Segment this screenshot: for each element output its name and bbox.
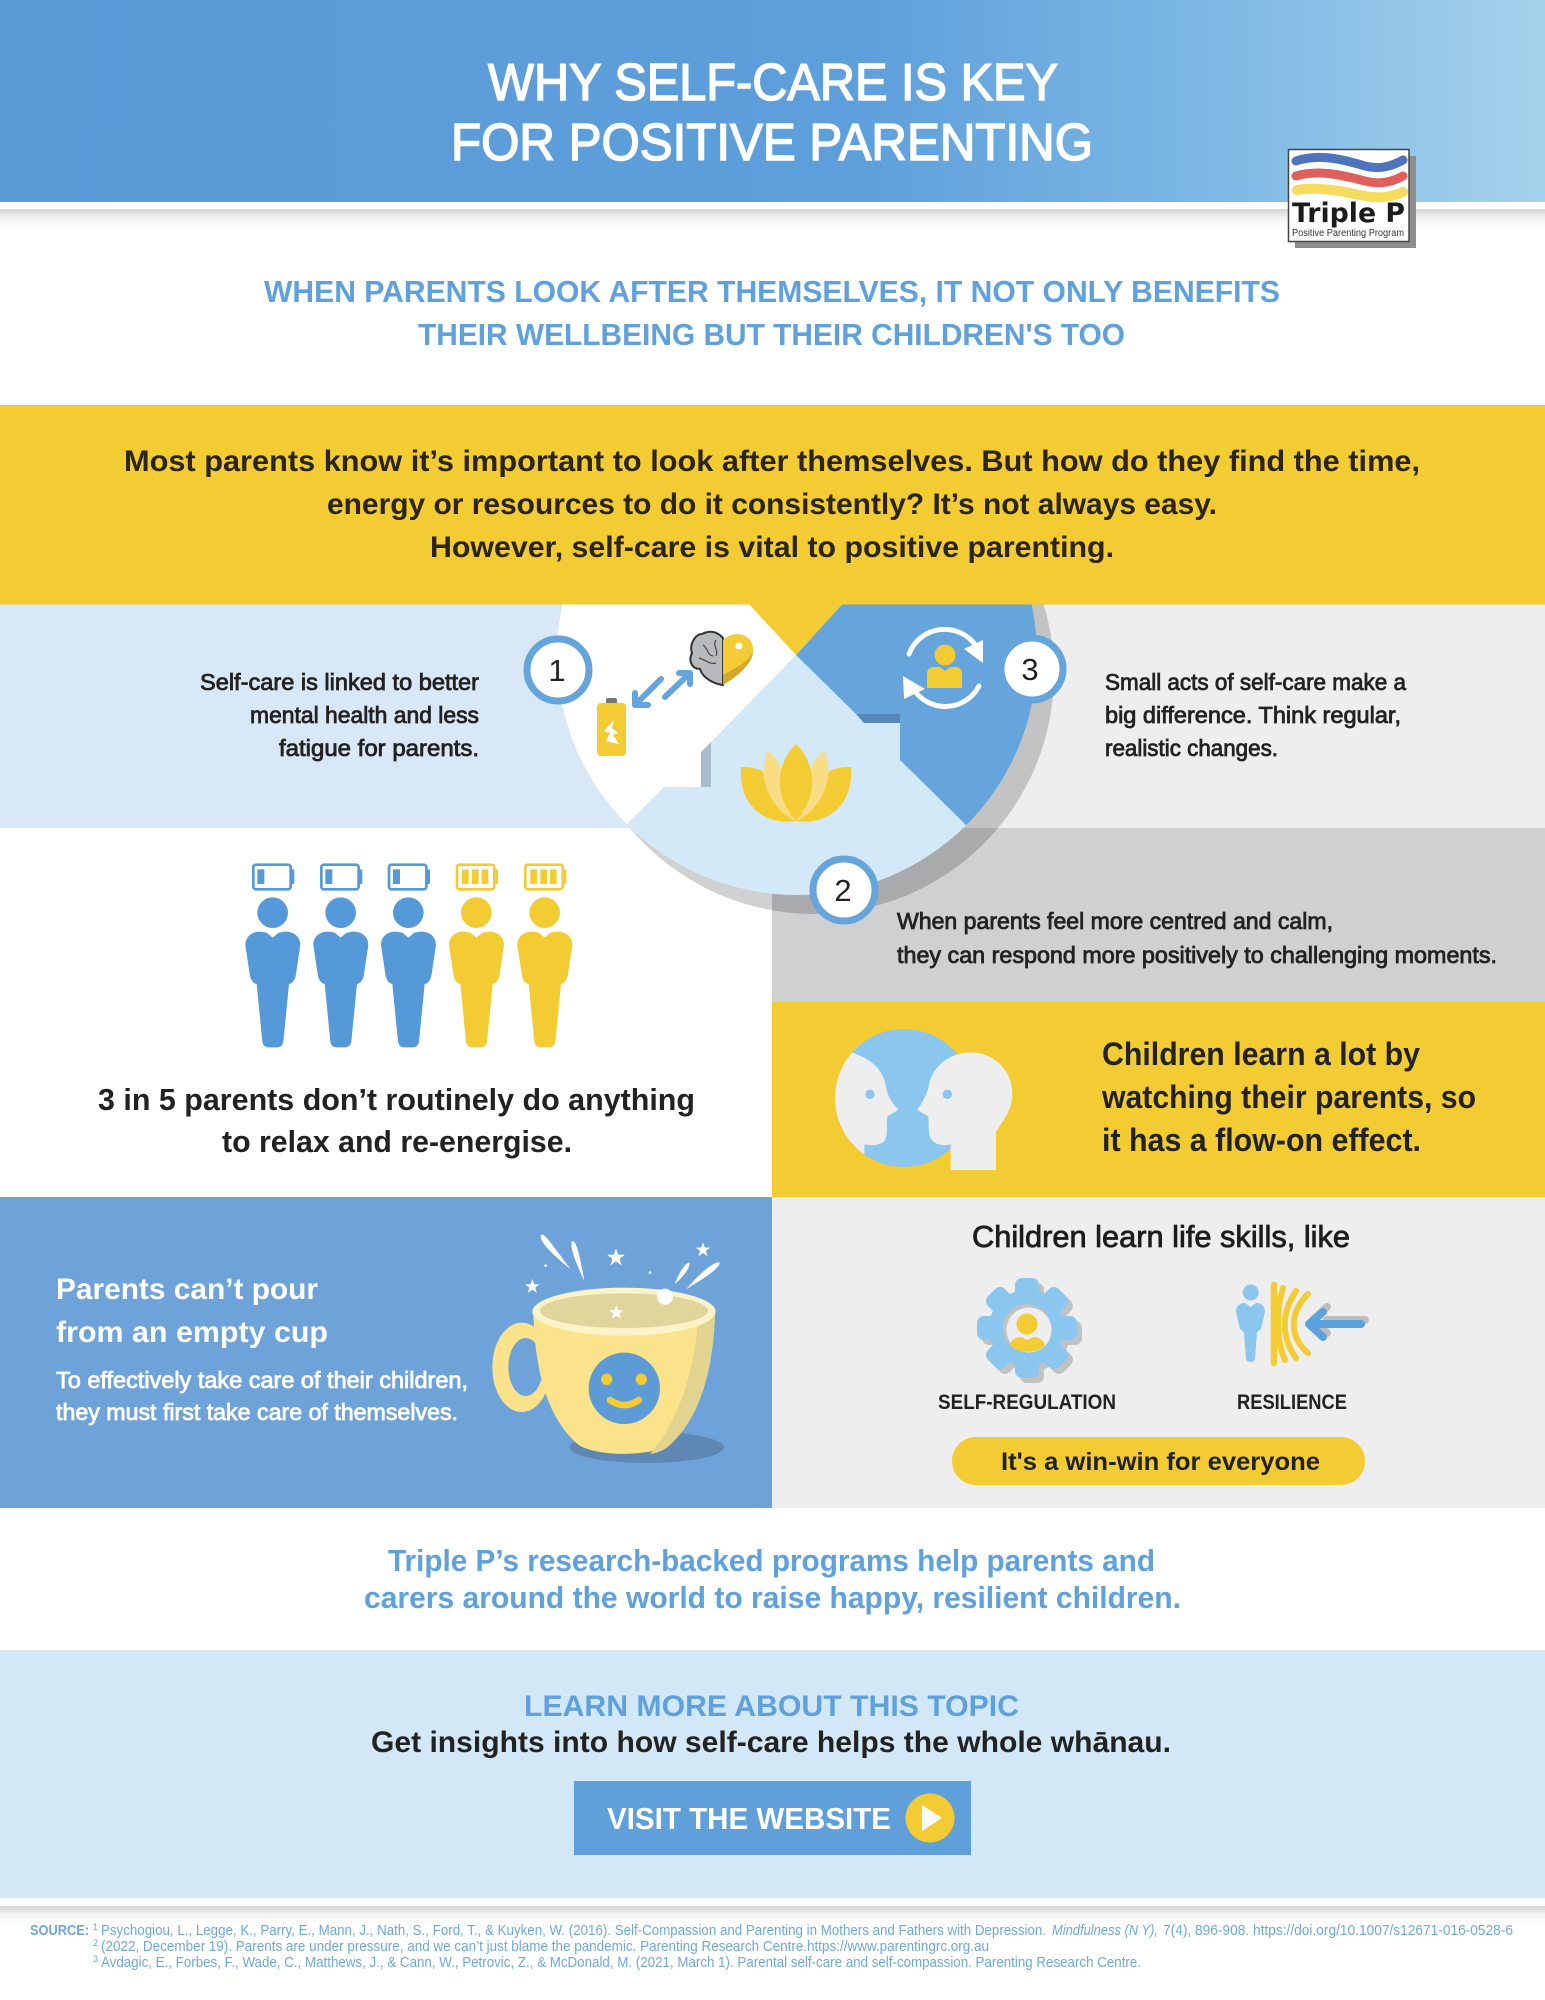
icon: lotus flower <box>741 744 851 822</box>
source references: 1 <box>93 1922 98 1932</box>
person 1 low battery <box>245 865 300 1047</box>
pill: win-win: It's a win-win for everyone <box>1001 1448 1320 1476</box>
text: point 1: Self-care is linked to better <box>200 669 479 695</box>
icon group: five people with batteries <box>245 865 572 1047</box>
person 2 low battery <box>313 865 368 1047</box>
subtitle: WHEN PARENTS LOOK AFTER THEMSELVES, IT NOT ONLY BENEFITS <box>264 274 1280 309</box>
statistic text: to relax and re-energise. <box>222 1124 572 1159</box>
number badge 2 <box>813 859 875 921</box>
source references: SOURCE: <box>30 1923 89 1939</box>
learn more heading: LEARN MORE ABOUT THIS TOPIC <box>524 1690 1019 1723</box>
label: self-regulation: SELF-REGULATION <box>938 1391 1116 1414</box>
statistic text: 3 in 5 parents don’t routinely do anything <box>98 1082 695 1117</box>
source references: Avdagic, E., Forbes, F., Wade, C., Matthews, J., & Cann, W., Petrovic, Z., & McDonald, M. (2021, March 1). Parental self-care and self-compassion. Parenting Research Centre. <box>101 1955 1141 1971</box>
pill: win-win <box>952 1437 1365 1485</box>
panel: yellow intro band <box>0 405 1545 604</box>
empty cup body text: To effectively take care of their children, <box>56 1367 468 1393</box>
number badge 2: 2 <box>834 873 852 908</box>
children learn text: Children learn a lot by <box>1102 1036 1420 1072</box>
text: point 3: realistic changes. <box>1105 735 1278 761</box>
text: point 3 <box>1105 669 1406 761</box>
circle wedges <box>558 604 1036 895</box>
text: point 1: fatigue for parents. <box>279 735 479 761</box>
icon: smiling cup <box>492 1234 724 1463</box>
panel: learn more <box>0 1650 1545 1898</box>
intro text: energy or resources to do it consistently? It’s not always easy. <box>327 488 1217 521</box>
icon: brain and heart <box>690 632 753 685</box>
source references: 7(4), 896-908. https://doi.org/10.1007/s12671-016-0528-6 <box>1163 1923 1513 1939</box>
empty cup heading <box>56 1273 328 1349</box>
footer shadow <box>0 1906 1545 1924</box>
icon: battery <box>597 698 626 756</box>
life skills heading: Children learn life skills, like <box>972 1219 1350 1254</box>
panel: life skills, grey <box>772 1197 1545 1508</box>
circle drop shadow <box>574 434 1054 914</box>
icon: self-care cycle <box>903 629 983 706</box>
text: point 2 <box>897 908 1497 968</box>
learn more subheading: Get insights into how self-care helps the whole whānau. <box>371 1726 1171 1759</box>
icon: double arrows <box>635 673 690 705</box>
subtitle: THEIR WELLBEING BUT THEIR CHILDREN'S TOO <box>418 317 1125 352</box>
title <box>451 54 1093 172</box>
panel: empty cup, blue <box>0 1197 772 1508</box>
text: point 3: big difference. Think regular, <box>1105 702 1401 728</box>
icon: gear with person <box>977 1278 1082 1383</box>
text: research-backed programs: Triple P’s research-backed programs help parents and <box>388 1543 1155 1578</box>
person 3 low battery <box>381 865 436 1047</box>
button: visit the website <box>574 1781 971 1855</box>
panel: light blue row, self-care point 1 <box>0 604 772 828</box>
intro text: Most parents know it’s important to look after themselves. But how do they find the time, <box>124 445 1420 478</box>
person 4 full battery <box>449 865 504 1047</box>
button: visit the website: VISIT THE WEBSITE <box>607 1801 891 1836</box>
source references: (2022, December 19). Parents are under pressure, and we can’t just blame the pandemic. Parenting Research Centre.https://www.parentingrc.org.au <box>101 1939 989 1955</box>
label: resilience: RESILIENCE <box>1237 1391 1347 1414</box>
text: research-backed programs: carers around the world to raise happy, resilient children. <box>364 1580 1181 1615</box>
empty cup body text <box>56 1367 468 1425</box>
children learn text: watching their parents, so <box>1101 1079 1476 1115</box>
source references: 3 <box>93 1954 98 1964</box>
text: point 3: Small acts of self-care make a <box>1105 669 1406 695</box>
panel: light grey row, self-care point 3 <box>772 604 1545 828</box>
central circle diagram <box>524 604 1066 924</box>
empty cup body text: they must first take care of themselves. <box>56 1399 458 1425</box>
icon: two faces <box>830 1029 1012 1170</box>
intro text: However, self-care is vital to positive parenting. <box>430 531 1114 564</box>
source references <box>30 1922 1513 1971</box>
statistic text <box>98 1082 695 1159</box>
children learn text <box>1101 1036 1476 1158</box>
text: point 2: When parents feel more centred and calm, <box>897 908 1333 934</box>
logo: Triple P <box>1288 150 1416 248</box>
title: WHY SELF-CARE IS KEY <box>488 54 1058 112</box>
empty cup heading: from an empty cup <box>56 1316 328 1349</box>
text: point 1: mental health and less <box>250 702 479 728</box>
text: point 2: they can respond more positively to challenging moments. <box>897 942 1497 968</box>
person 5 full battery <box>517 865 572 1047</box>
text: research-backed programs <box>364 1543 1181 1615</box>
number badge 3: 3 <box>1021 652 1039 687</box>
source references: Mindfulness (N Y), <box>1052 1923 1158 1939</box>
icon: resilience shield and arrow <box>1236 1284 1365 1363</box>
panel: mid grey row, self-care point 2 <box>772 828 1545 1002</box>
source references: 2 <box>93 1938 98 1948</box>
source references: Psychogiou, L., Legge, K., Parry, E., Mann, J., Nath, S., Ford, T., & Kuyken, W. (2016). Self-Compassion and Parenting in Mothers and Fathers with Depression. <box>101 1923 1046 1939</box>
logo: Triple P: Positive Parenting Program <box>1292 228 1404 239</box>
number badge 3 <box>1001 638 1063 700</box>
number badge 1: 1 <box>548 653 566 688</box>
number badge 1 <box>527 639 589 701</box>
text: point 1 <box>200 669 479 761</box>
logo: Triple P: Triple P <box>1292 198 1405 229</box>
header band <box>0 0 1545 229</box>
children learn text: it has a flow-on effect. <box>1102 1122 1421 1158</box>
intro text <box>124 445 1420 564</box>
empty cup heading: Parents can’t pour <box>56 1273 318 1306</box>
panel: children learn, yellow <box>772 1002 1545 1197</box>
subtitle <box>264 274 1280 352</box>
title: FOR POSITIVE PARENTING <box>451 114 1093 172</box>
